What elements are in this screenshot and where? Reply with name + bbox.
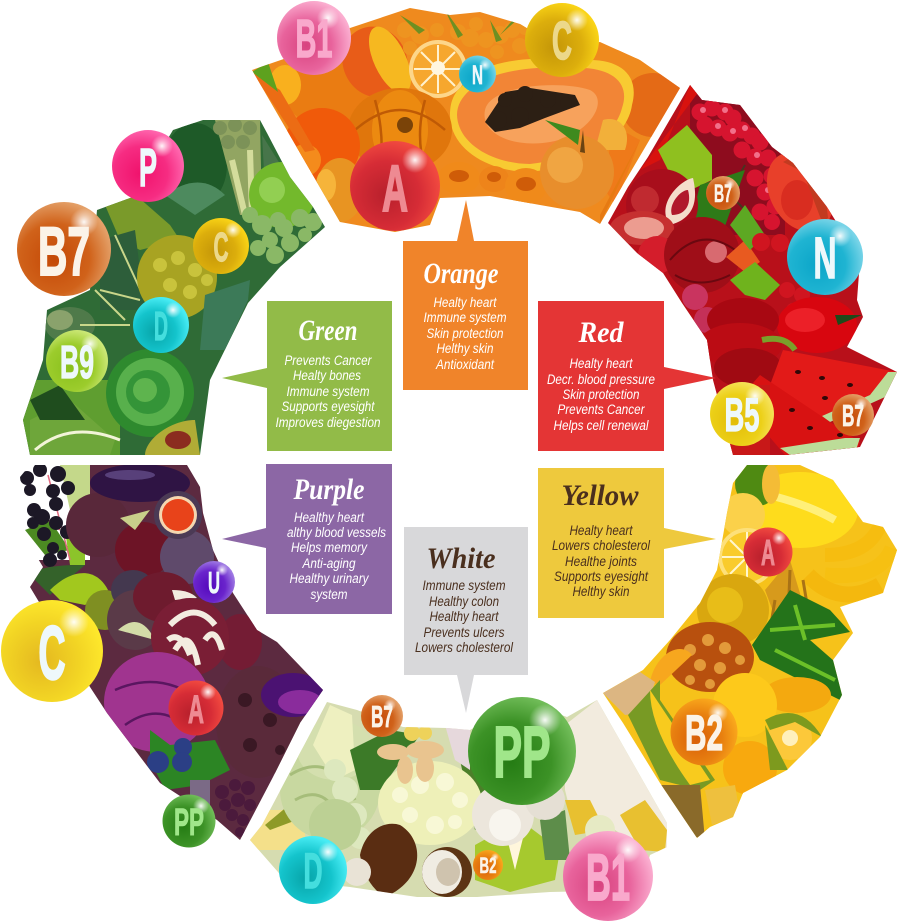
vitamin B2	[670, 698, 738, 766]
benefits: green: Healty bones	[293, 368, 361, 383]
benefits: purple: system	[310, 587, 348, 602]
vitamin C	[193, 218, 249, 274]
vitamin A: A	[188, 688, 204, 732]
vitamin D	[279, 836, 347, 904]
heading: yellow: Yellow	[562, 479, 639, 512]
benefits: orange: Helthy skin	[436, 341, 494, 356]
benefits: yellow: Helthy skin	[572, 584, 630, 599]
panel: white	[404, 527, 528, 713]
benefits: yellow: Lowers cholesterol	[552, 538, 651, 553]
vitamin C: C	[214, 224, 228, 270]
vitamin PP large: PP	[494, 713, 550, 793]
panel: red	[538, 301, 716, 451]
panel: purple	[222, 464, 392, 614]
vitamin P	[112, 130, 184, 202]
vitamin D	[133, 297, 189, 353]
benefits: purple: althy blood vessels	[287, 525, 386, 540]
vitamin B7 lower: B7	[842, 398, 864, 433]
sector: purple foods	[1, 460, 330, 848]
benefits: red: Prevents Cancer	[558, 402, 645, 417]
vitamin N: N	[472, 60, 483, 90]
benefits: white: Healthy colon	[429, 594, 499, 609]
purple food illustration	[15, 460, 330, 845]
vitamin U: U	[208, 565, 220, 600]
vitamin PP small: PP	[174, 802, 204, 844]
vitamin C large: C	[38, 611, 66, 695]
vitamin A small	[744, 528, 792, 576]
green food illustration	[20, 118, 330, 458]
sector: white foods	[245, 695, 675, 921]
benefits: yellow: Healty heart	[570, 523, 634, 538]
vitamin P: P	[139, 138, 157, 198]
benefits: yellow: Healthe joints	[565, 554, 637, 569]
vitamin A small: A	[761, 532, 775, 573]
vitamin B7 small	[706, 176, 740, 210]
benefits: green	[276, 353, 380, 430]
vitamin B1 lower	[563, 831, 653, 921]
red food illustration	[600, 80, 900, 460]
vitamin N	[459, 56, 496, 92]
vitamin C large	[1, 600, 103, 702]
benefits: red: Helps cell renewal	[554, 418, 649, 433]
vitamin B7 large	[17, 202, 111, 296]
benefits: purple: Healthy heart	[294, 510, 365, 525]
yellow food illustration	[600, 460, 900, 845]
benefits: orange: Immune system	[424, 310, 506, 325]
benefits: green: Prevents Cancer	[284, 353, 372, 368]
vitamin A	[350, 141, 440, 231]
vitamin PP large	[468, 697, 576, 805]
vitamin D: D	[154, 303, 168, 349]
benefits: orange: Antioxidant	[435, 357, 495, 372]
vitamin B7 small: B7	[714, 180, 732, 208]
heading: green: Green	[298, 314, 358, 347]
benefits: red: Decr. blood pressure	[547, 372, 655, 387]
vitamin B9: B9	[60, 336, 94, 388]
benefits: white: Immune system	[422, 578, 506, 593]
vitamin B2 small: B2	[480, 853, 496, 878]
sector: red foods	[600, 80, 900, 460]
vitamin C: C	[552, 11, 572, 71]
heading: orange: Orange	[424, 257, 498, 290]
vitamin U	[193, 561, 235, 603]
vitamin D: D	[304, 843, 322, 899]
vitamin A	[168, 680, 224, 736]
vitamin B7 large: B7	[38, 213, 90, 290]
vitamin B1: B1	[296, 9, 332, 69]
vitamin B5: B5	[724, 388, 760, 441]
vitamin N large	[787, 219, 863, 295]
benefits: green: Immune system	[286, 384, 370, 399]
benefits: yellow: Supports eyesight	[554, 569, 649, 584]
white food illustration	[245, 695, 675, 900]
vitamin PP small	[162, 794, 216, 848]
vitamin B7	[361, 695, 403, 737]
vitamin B7: B7	[371, 699, 393, 734]
panel: orange	[403, 200, 528, 390]
benefits: purple	[287, 510, 386, 602]
benefits: orange: Healty heart	[434, 295, 498, 310]
benefits: red	[547, 356, 655, 433]
benefits: green: Improves diegestion	[276, 415, 380, 430]
vitamin A: A	[382, 151, 408, 225]
vitamin B2: B2	[685, 705, 723, 761]
benefits: purple: Healthy urinary	[290, 571, 370, 586]
benefits: green: Supports eyesight	[282, 399, 376, 414]
benefits: white: Prevents ulcers	[424, 625, 505, 640]
sector: orange foods	[250, 1, 690, 235]
benefits: orange: Skin protection	[426, 326, 504, 341]
vitamin C	[525, 3, 599, 77]
benefits: purple: Anti-aging	[302, 556, 356, 571]
benefits: orange	[424, 295, 506, 372]
benefits: white	[415, 578, 514, 655]
sector: yellow foods	[600, 460, 900, 845]
benefits: yellow	[552, 523, 651, 599]
heading: purple: Purple	[293, 473, 364, 506]
panel: yellow	[538, 468, 716, 618]
vitamin B1	[277, 1, 351, 75]
vitamin B5	[710, 382, 774, 446]
panel: green	[222, 301, 392, 451]
benefits: purple: Helps memory	[291, 540, 368, 555]
benefits: white: Healthy heart	[430, 609, 500, 624]
vitamin N large: N	[814, 226, 836, 291]
sector: green foods	[17, 118, 330, 458]
vitamin B1 lower: B1	[586, 840, 630, 914]
benefits: white: Lowers cholesterol	[415, 640, 514, 655]
orange food illustration	[250, 5, 690, 235]
heading: red: Red	[578, 316, 624, 349]
vitamin B9	[46, 330, 108, 392]
vitamin B7 lower	[832, 394, 874, 436]
benefits: red: Healty heart	[570, 356, 634, 371]
vitamin B2 small	[473, 850, 503, 880]
heading: white: White	[426, 542, 496, 575]
benefits: red: Skin protection	[562, 387, 640, 402]
